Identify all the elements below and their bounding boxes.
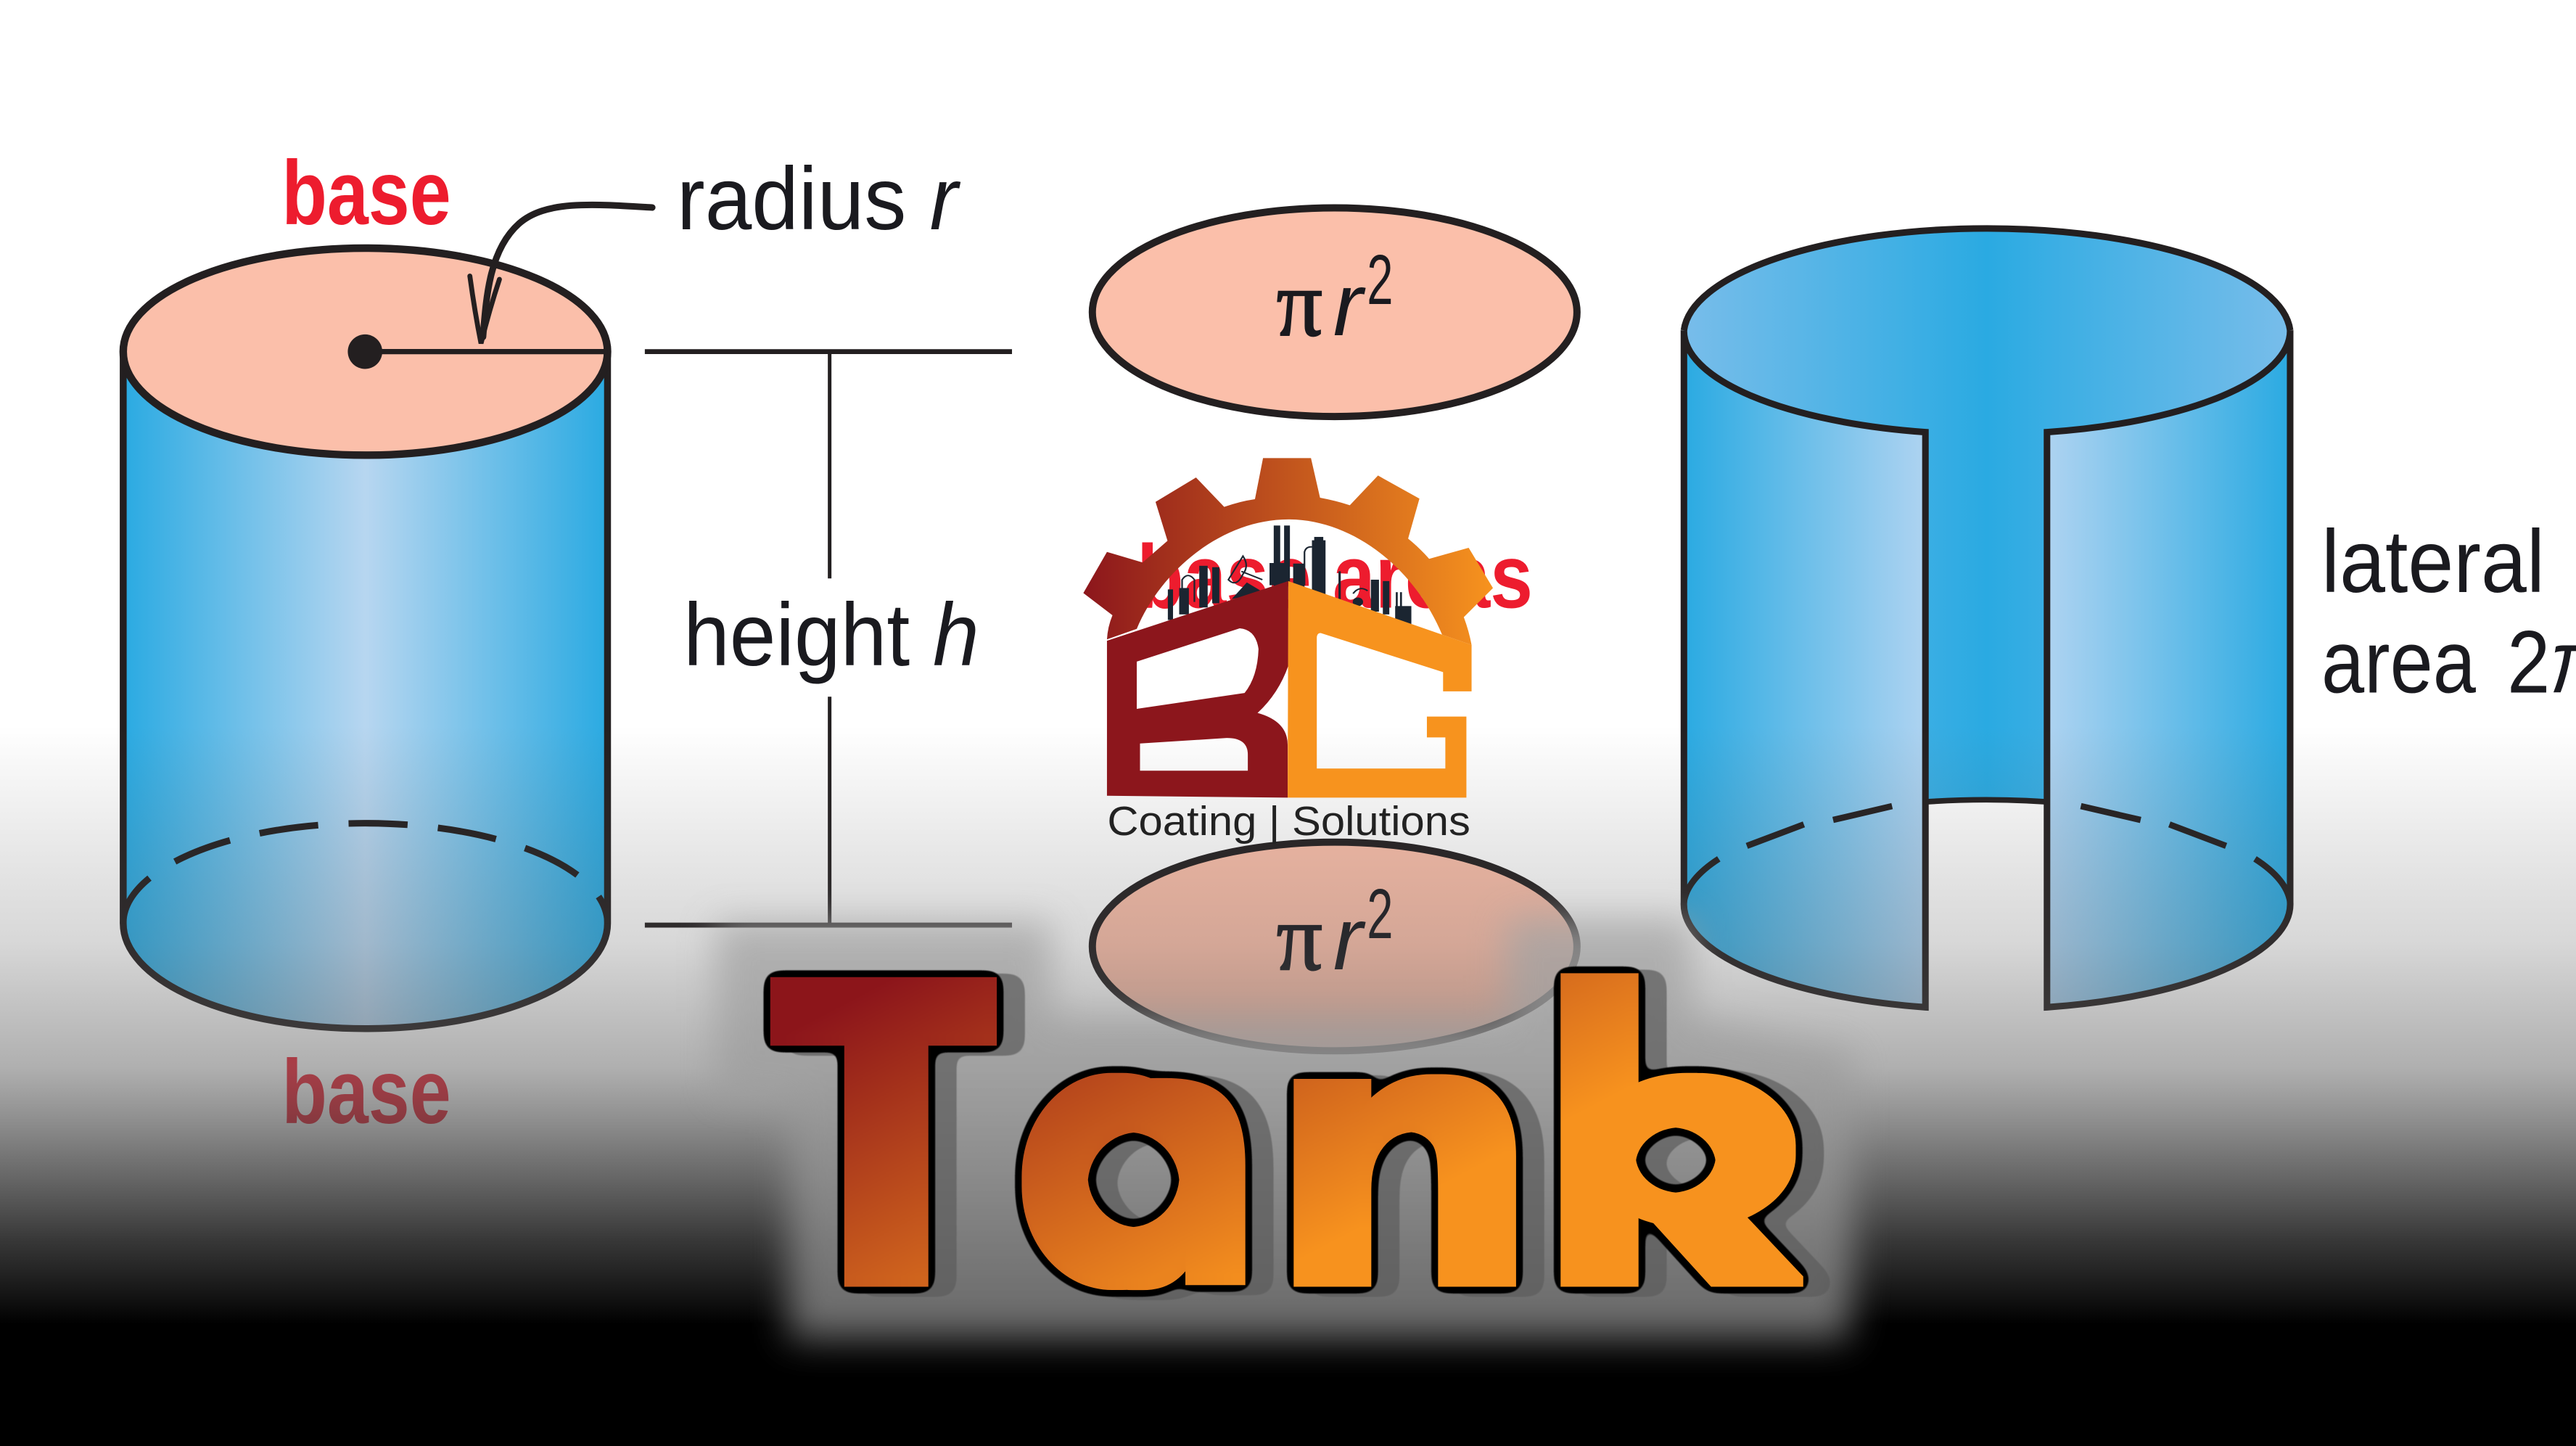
logo — [1083, 458, 1493, 844]
title: Tank: k — [1533, 911, 1800, 1376]
left cylinder — [123, 248, 608, 1029]
label: base at bottom: base — [281, 1040, 451, 1143]
title: Tank: a — [1071, 954, 1262, 1363]
top circle area: r — [1333, 255, 1366, 354]
arrow: radius pointer — [470, 205, 652, 343]
title: Tank: n — [1267, 947, 1541, 1367]
label: base areas: base areas — [1137, 526, 1533, 627]
bottom circle area: 2 — [1367, 874, 1393, 953]
title: Tank: T — [774, 900, 995, 1379]
label: height h: height h — [683, 585, 979, 684]
label: area 2 pi r h (clipped at page edge): 2 — [2507, 612, 2550, 712]
title: Tank — [763, 966, 1830, 1300]
top circle area: 2 — [1367, 240, 1393, 319]
bottom circle area: π — [1277, 885, 1322, 990]
label: area 2 pi r h (clipped at page edge): area — [2321, 612, 2476, 712]
top circle area — [1092, 208, 1577, 416]
top circle area: π — [1277, 251, 1322, 356]
title glow — [716, 919, 1853, 1339]
bottom circle area: r — [1333, 889, 1366, 988]
dimension: height lines — [645, 352, 1012, 925]
logo artwork: gear, refinery, BG letters — [1083, 458, 1493, 797]
label: radius r: radius r — [677, 149, 960, 248]
bottom circle area — [1092, 842, 1577, 1051]
logo: Coating | Solutions — [1107, 798, 1470, 844]
label: top base: base — [281, 141, 451, 244]
label: lateral: lateral — [2321, 512, 2545, 611]
right cylinder with lateral cut — [1684, 229, 2290, 1007]
